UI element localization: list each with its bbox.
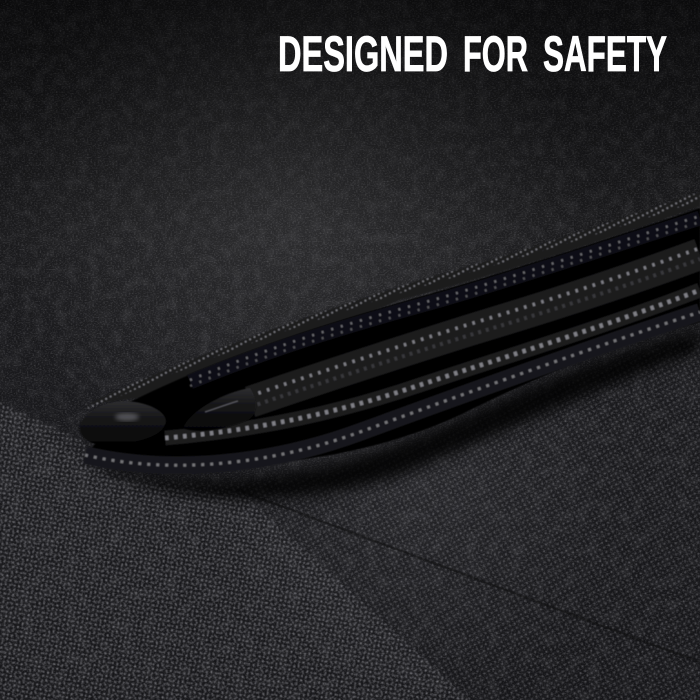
tooth row: lower xyxy=(165,290,700,438)
tooth row: upper xyxy=(190,218,700,382)
title: FOR xyxy=(463,26,528,82)
zipper opening xyxy=(90,208,700,464)
title: DESIGNED xyxy=(278,26,448,82)
lower tape xyxy=(85,312,700,465)
zipper xyxy=(80,192,700,499)
upper fabric lip xyxy=(85,192,700,410)
tooth row: main xyxy=(250,254,700,402)
title xyxy=(278,26,667,82)
slider right xyxy=(183,388,256,431)
slider left xyxy=(80,401,166,445)
lower shadow xyxy=(85,330,700,499)
